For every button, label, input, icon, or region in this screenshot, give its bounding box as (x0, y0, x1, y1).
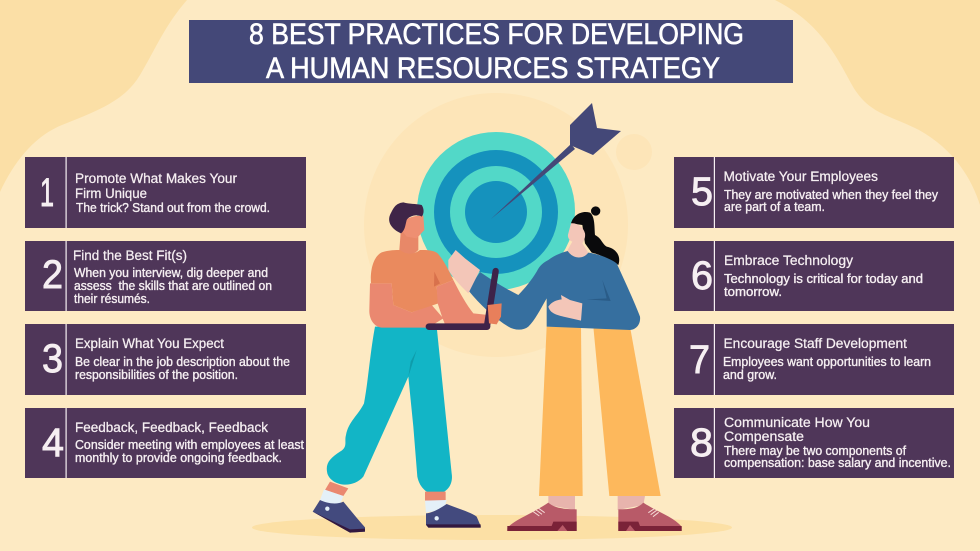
card 3: Explain What You Expect (75, 336, 224, 351)
card 5 (674, 157, 954, 228)
card 4: Consider meeting with employees at least (75, 438, 305, 452)
man hair (389, 202, 424, 233)
card 2: When you interview, dig deeper and (74, 266, 268, 280)
card 3 (25, 324, 306, 395)
card 4: 4 (42, 421, 64, 465)
woman sweater (468, 251, 640, 330)
card 4: monthly to provide ongoing feedback. (75, 451, 282, 465)
small pale circle (616, 134, 652, 170)
card 3: 3 (42, 337, 63, 381)
card 1: Promote What Makes Your (75, 171, 238, 186)
woman raised hand (448, 250, 480, 293)
man socks (320, 489, 447, 513)
card 6: Embrace Technology (724, 253, 853, 268)
target (417, 132, 575, 290)
man trousers (327, 327, 452, 494)
card 8: Communicate How You (724, 415, 870, 430)
card 6 (674, 241, 954, 311)
card 3: Be clear in the job description about the (75, 355, 290, 369)
card 6: Technology is critical for today and (724, 272, 923, 286)
card 8: 8 (690, 421, 713, 465)
card 8 (674, 408, 954, 478)
card 7: and grow. (723, 368, 777, 382)
card 5: 5 (691, 170, 713, 214)
card 8: compensation: base salary and incentive. (724, 456, 951, 470)
pale circle behind target (364, 93, 628, 357)
woman face and neck (567, 223, 588, 258)
card 3: responsibilities of the position. (75, 368, 238, 382)
card 2 (25, 241, 306, 311)
card 2: assess the skills that are outlined on (74, 279, 272, 293)
card 2: their résumés. (74, 292, 150, 306)
title banner (189, 18, 793, 85)
man shirt fold (434, 272, 440, 287)
title banner: 8 BEST PRACTICES FOR DEVELOPING (249, 18, 744, 51)
man hand (488, 303, 502, 324)
card 8: There may be two components of (724, 444, 907, 458)
man left arm (369, 283, 443, 328)
card 1 (25, 157, 306, 228)
card 6: tomorrow. (724, 285, 782, 299)
card 5: They are motivated when they feel they (724, 188, 939, 202)
man ankles (325, 482, 446, 501)
card 7: Encourage Staff Development (724, 336, 907, 351)
woman sweater fold (587, 280, 611, 301)
card 2: 2 (42, 253, 63, 297)
card 8: Compensate (724, 429, 804, 444)
man face (400, 216, 424, 238)
card 6: 6 (691, 254, 713, 298)
card 4: Feedback, Feedback, Feedback (75, 420, 268, 435)
card 7 (674, 324, 954, 395)
card 5: Motivate Your Employees (724, 169, 878, 184)
card 2: Find the Best Fit(s) (73, 248, 187, 263)
woman shoes (507, 503, 682, 531)
feet and shoes (313, 482, 682, 533)
woman trouser legs (539, 327, 661, 496)
title banner: A HUMAN RESOURCES STRATEGY (266, 52, 720, 85)
man shoes (313, 500, 481, 533)
man upper body (369, 202, 502, 328)
man shirt (371, 250, 453, 312)
card 7: 7 (689, 338, 710, 382)
card 4 (25, 408, 306, 478)
woman ankles (548, 496, 645, 510)
woman upper body (468, 206, 640, 330)
trouser fold (408, 350, 417, 377)
card 1: The trick? Stand out from the crowd. (76, 201, 270, 215)
woman hand on chest (548, 295, 582, 321)
card 5: are part of a team. (724, 200, 825, 214)
man right arm (437, 280, 488, 324)
card 1: 1 (40, 171, 54, 215)
arrow (491, 103, 621, 219)
laptop (429, 271, 496, 327)
man neck (399, 228, 418, 255)
woman hair (571, 206, 619, 265)
card 1: Firm Unique (75, 186, 147, 201)
card 7: Employees want opportunities to learn (723, 355, 931, 369)
ground shadow (252, 515, 732, 540)
